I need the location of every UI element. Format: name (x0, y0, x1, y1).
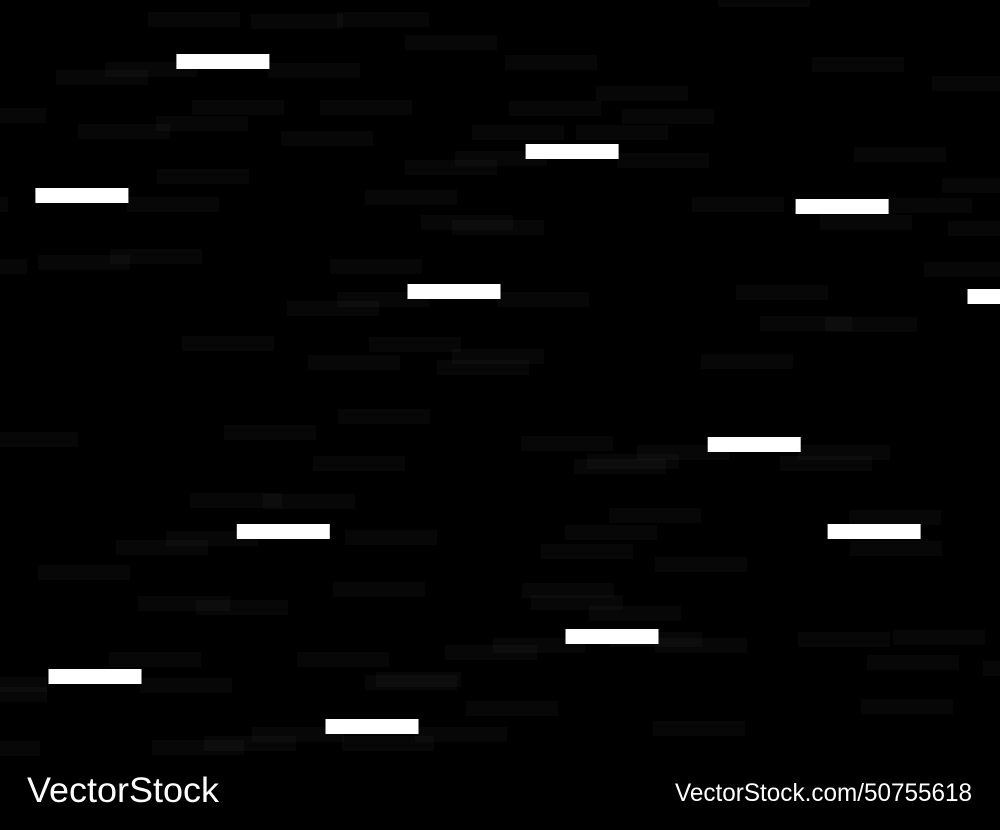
bright white bars (35, 54, 1000, 734)
brand logo text: VectorStock (27, 770, 219, 810)
image id text: VectorStock.com/50755618 (675, 779, 972, 807)
